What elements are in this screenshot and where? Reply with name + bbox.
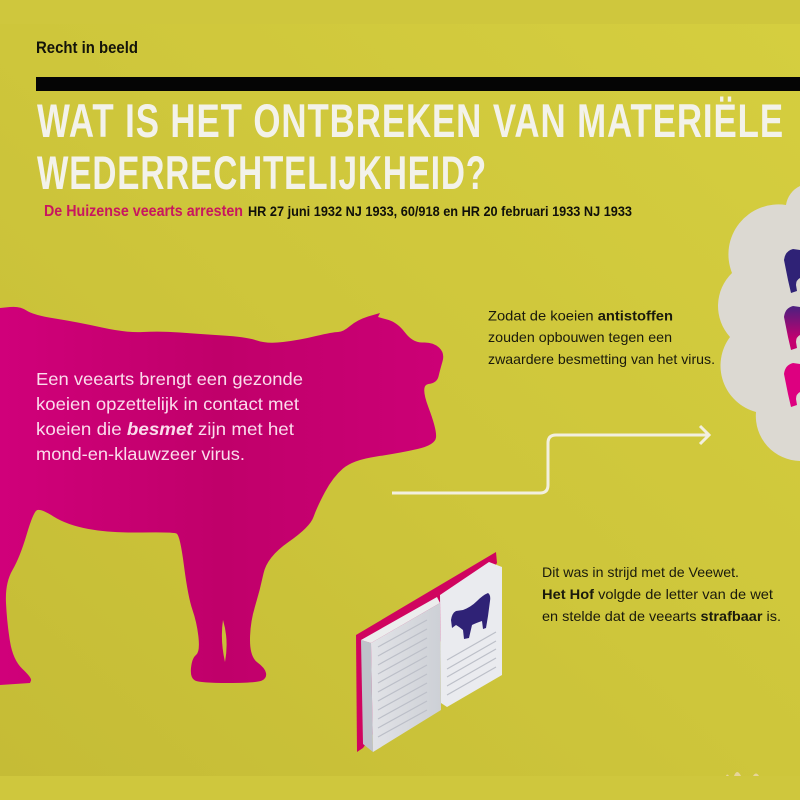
cropped cloud remnants <box>726 772 759 776</box>
title <box>37 94 784 199</box>
court text: Dit was in strijd met de Veewet. <box>542 564 739 580</box>
antibodies text: zouden opbouwen tegen een <box>488 329 672 345</box>
thought cloud <box>718 186 800 461</box>
icon: open book <box>356 552 502 752</box>
subtitle: case citation: De Huizense veearts arresten <box>44 203 243 220</box>
icon: navy cow <box>784 249 800 293</box>
icon: purple-magenta cow <box>784 306 800 350</box>
cow text <box>36 369 303 464</box>
cow text: koeien opzettelijk in contact met <box>36 394 299 414</box>
subtitle: case citation <box>44 203 632 220</box>
court text: en stelde dat de veearts strafbaar is. <box>542 608 781 624</box>
heading rule <box>36 77 800 91</box>
court text <box>542 564 781 624</box>
left page text lines <box>378 620 427 737</box>
antibodies text <box>488 308 715 367</box>
cow silhouette <box>0 307 443 685</box>
subtitle: case citation: HR 27 juni 1932 NJ 1933, 60/918 en HR 20 februari 1933 NJ 1933 <box>248 203 632 219</box>
court text: Het Hof volgde de letter van de wet <box>542 586 773 602</box>
antibodies text: Zodat de koeien antistoffen <box>488 308 673 324</box>
antibodies text: zwaardere besmetting van het virus. <box>488 351 715 367</box>
right page text lines <box>447 632 496 695</box>
cow text: koeien die besmet zijn met het <box>36 419 294 439</box>
icon: book cow <box>451 593 490 639</box>
cow text: Een veearts brengt een gezonde <box>36 369 303 389</box>
title: WEDERRECHTELIJKHEID? <box>37 146 487 199</box>
icon: magenta cow <box>784 363 800 407</box>
arrow <box>392 426 709 493</box>
cow text: mond-en-klauwzeer virus. <box>36 444 245 464</box>
section label: Recht in beeld <box>36 39 138 57</box>
